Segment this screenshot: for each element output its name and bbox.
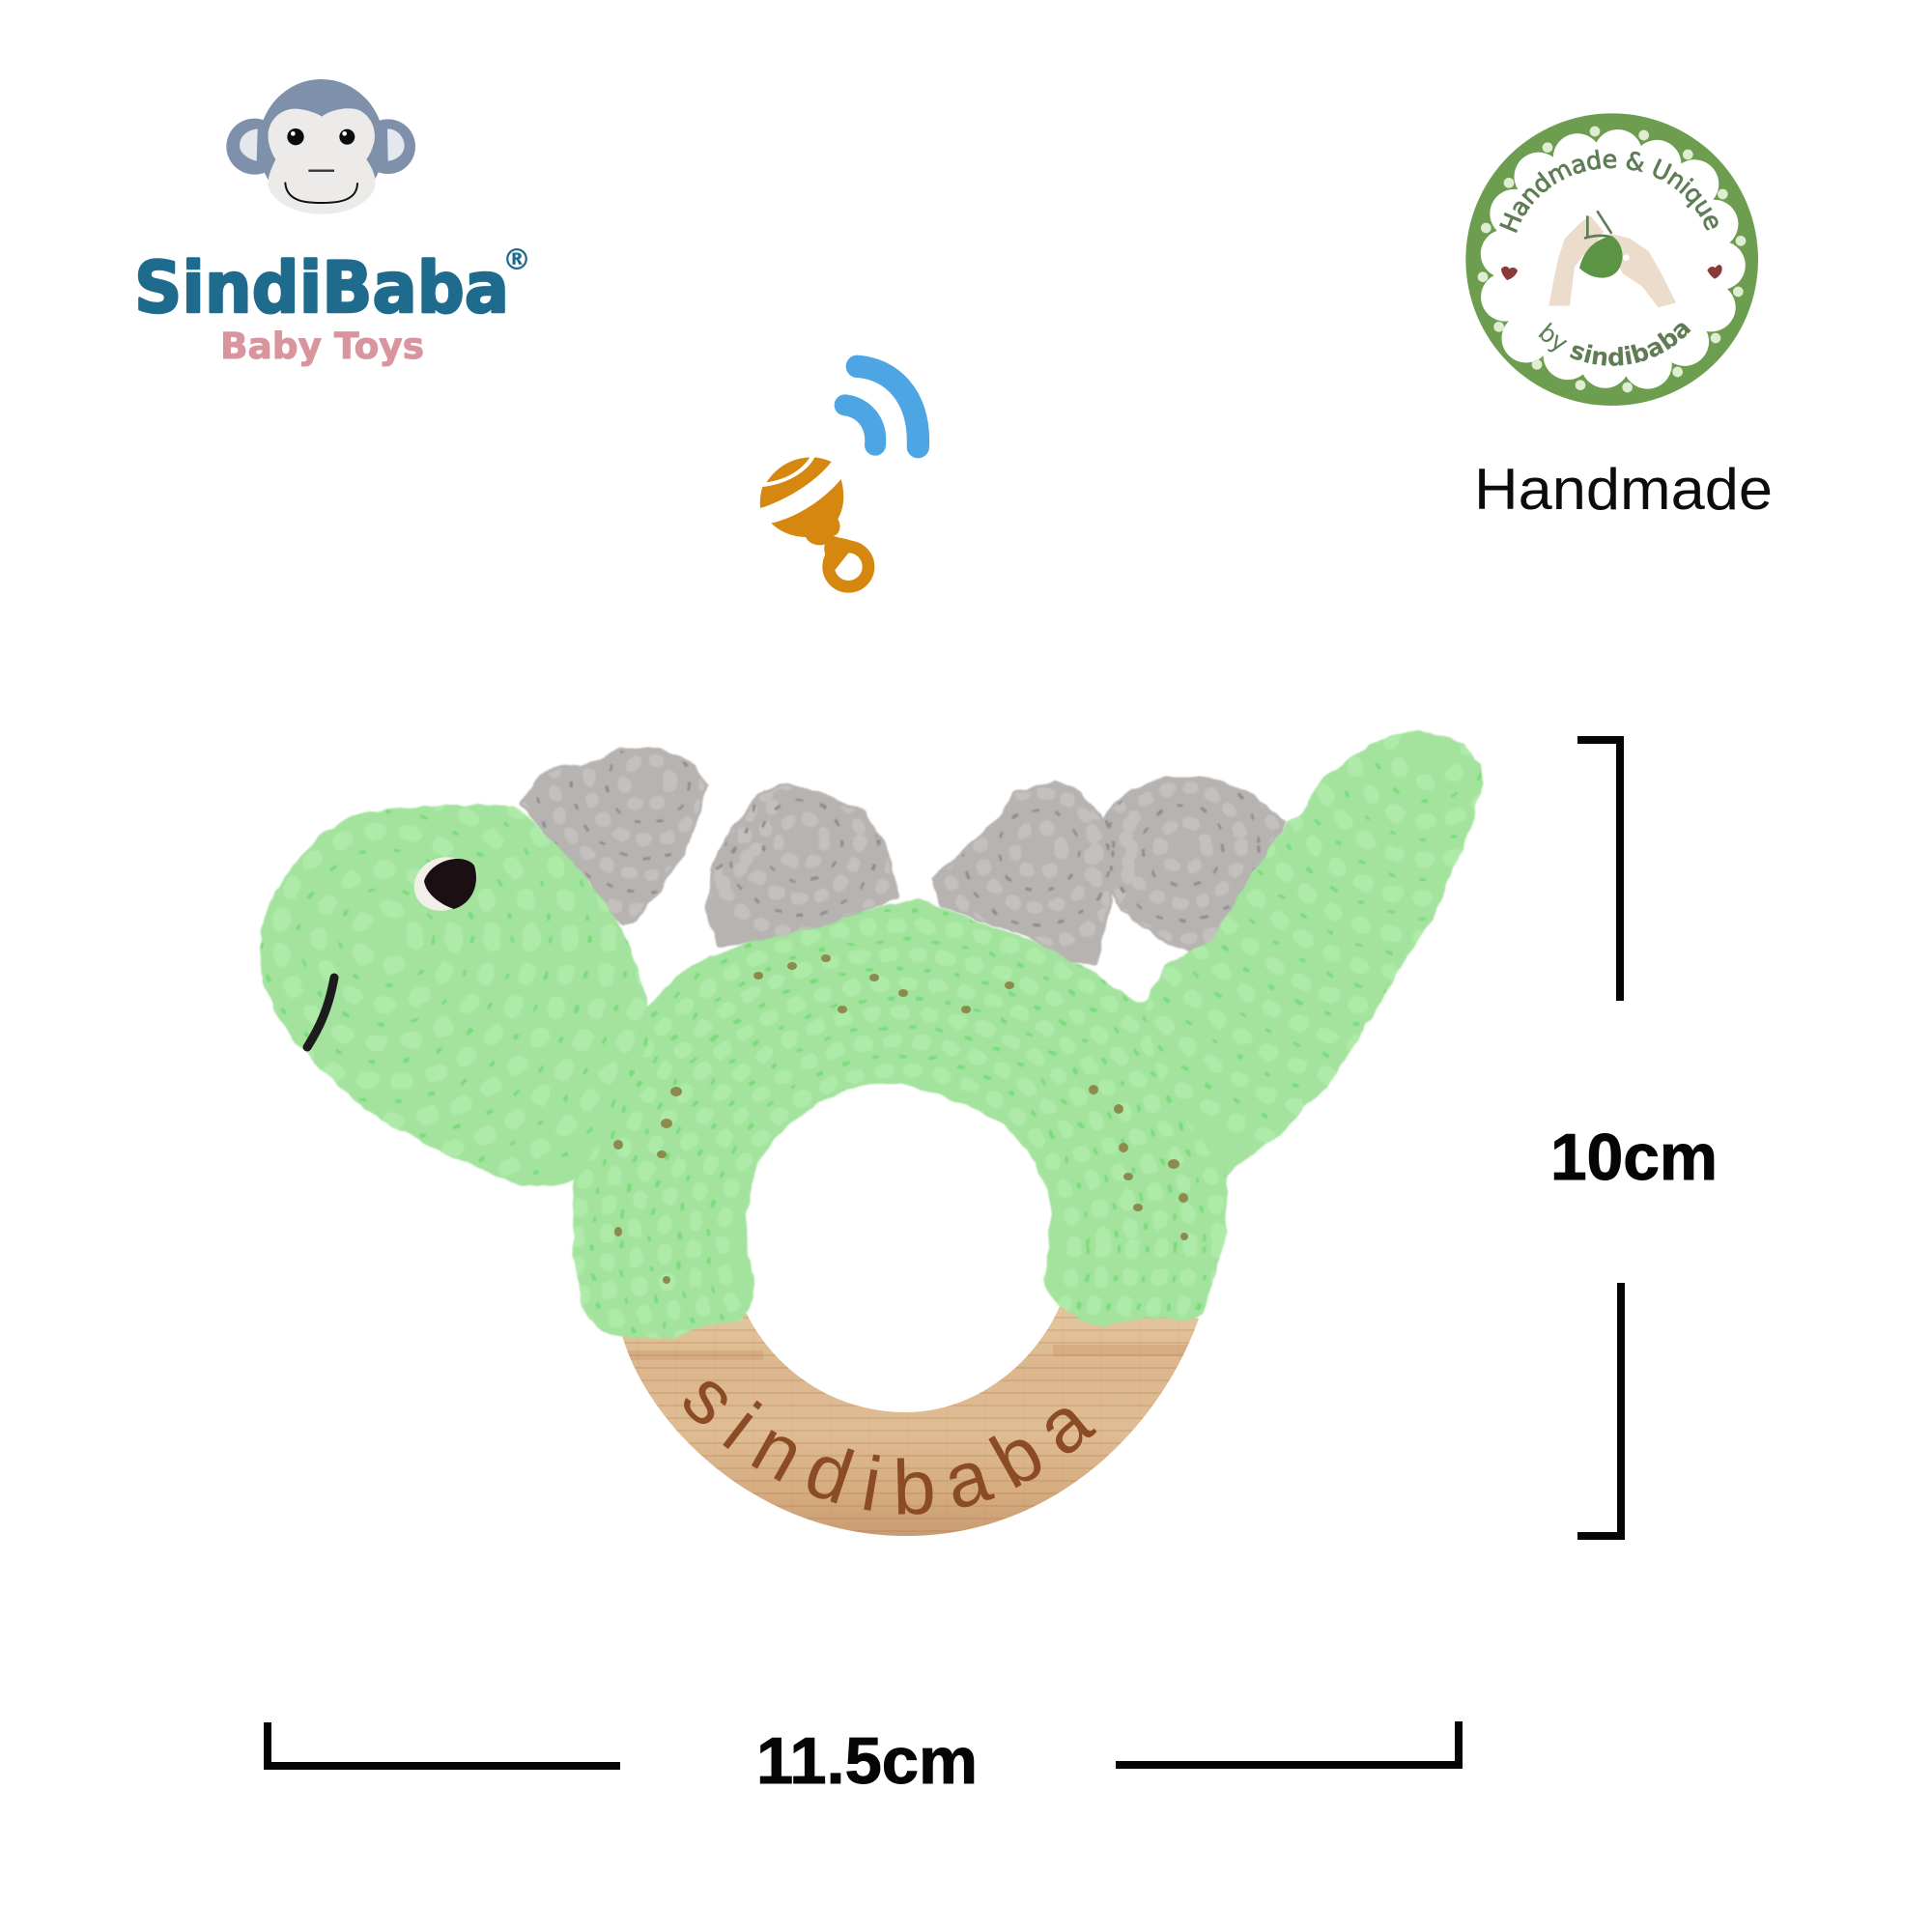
- logo: SindiBaba Baby Toys: [134, 79, 531, 367]
- eye: [405, 847, 482, 921]
- icon: left heart: [1501, 267, 1518, 280]
- scalloped centre: [1481, 129, 1746, 389]
- wooden teething ring: [622, 1305, 1199, 1536]
- icon: knitting hands: [1548, 211, 1676, 307]
- icon: right heart: [1707, 265, 1722, 279]
- badge: Handmade and Unique: [1465, 113, 1758, 406]
- green body and tail: [572, 729, 1484, 1340]
- height label: 10cm: [1550, 1121, 1718, 1194]
- badge top text: Handmade & Unique: [1499, 149, 1719, 234]
- sound waves: [845, 366, 918, 447]
- stitching seam holes: [613, 954, 1188, 1284]
- registered mark: ®: [502, 243, 531, 277]
- scallop dots: [1478, 127, 1746, 392]
- icon: monkey face: [226, 79, 415, 214]
- icon: rattle with sound waves: [760, 366, 918, 586]
- width label: 11.5cm: [756, 1724, 978, 1798]
- green head: [259, 803, 648, 1187]
- dimension: height bracket: [1550, 740, 1718, 1536]
- dimension: width bracket: [268, 1721, 1459, 1798]
- tagline: Baby Toys: [220, 326, 424, 367]
- rattle: [760, 457, 868, 586]
- label: Handmade: Handmade: [1474, 457, 1773, 522]
- engraved text: sindibaba: [684, 1381, 1097, 1515]
- product photo: crochet dinosaur rattle: [259, 729, 1484, 1536]
- mouth: [307, 978, 334, 1047]
- badge bottom text: by sindibaba: [1538, 323, 1690, 366]
- grey back spikes: [518, 746, 1287, 966]
- brand name: SindiBaba: [134, 247, 509, 329]
